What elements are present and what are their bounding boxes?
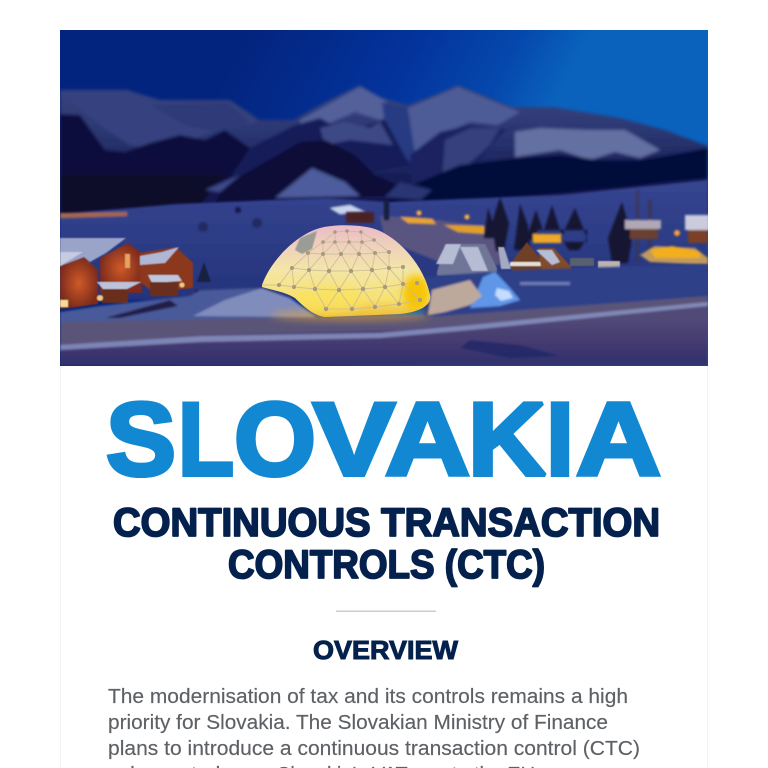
snowfield	[60, 180, 708, 300]
trees and village in distance	[198, 190, 709, 265]
hero photo: snowy Slovak mountain village with glowing dome at dusk	[60, 30, 709, 366]
divider	[336, 610, 436, 612]
glowing geodesic dome	[255, 220, 437, 321]
overview body text	[108, 685, 640, 768]
subtitle: continuous transaction controls	[113, 501, 660, 587]
foreground snow drifts and road	[60, 264, 708, 366]
mountains	[60, 85, 708, 215]
title: SLOVAKIA	[106, 382, 661, 498]
overview body text: priority for Slovakia. The Slovakian Ministry of Finance	[108, 711, 608, 734]
title: SLOVAKIA: A	[385, 382, 470, 498]
chalets at right of dome	[436, 242, 620, 276]
subtitle: continuous transaction controls: CONTROLS (CTC)	[228, 543, 545, 587]
content panel	[60, 360, 708, 768]
title: SLOVAKIA: L	[178, 382, 234, 498]
title: SLOVAKIA: V	[313, 382, 395, 498]
overview body text: The modernisation of tax and its controls remains a high	[108, 685, 628, 708]
title: SLOVAKIA: K	[468, 382, 546, 498]
title: SLOVAKIA: S	[106, 382, 176, 498]
overview body text: plans to introduce a continuous transaction control (CTC)	[108, 737, 640, 760]
chalets at left	[60, 237, 220, 310]
heading: overview: OVERVIEW	[313, 635, 458, 665]
title: SLOVAKIA: I	[546, 382, 574, 498]
title: SLOVAKIA: O	[234, 382, 316, 498]
subtitle: continuous transaction controls: CONTINUOUS TRANSACTION	[113, 501, 660, 545]
title: SLOVAKIA: A	[576, 382, 661, 498]
